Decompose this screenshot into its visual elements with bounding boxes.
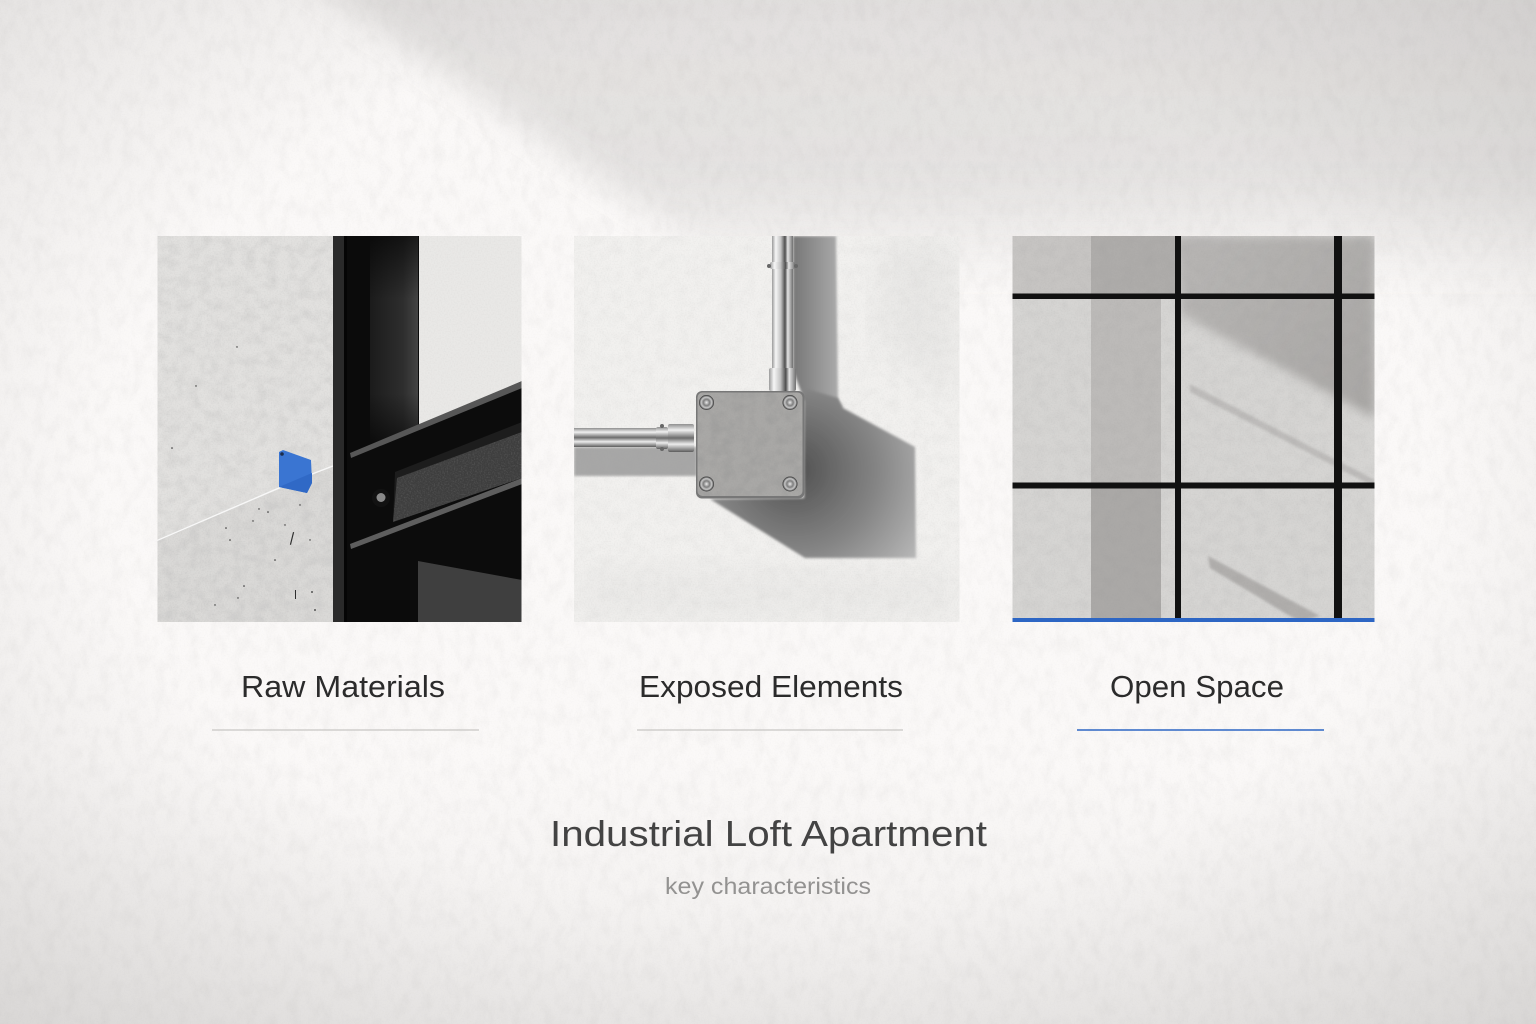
- panel: exposed elements photo: [574, 236, 960, 622]
- label: raw materials: Raw Materials: [241, 669, 445, 704]
- vertical conduit: [767, 236, 798, 391]
- cast shadow: junction box: [710, 388, 916, 558]
- label: open space: Open Space: [1110, 669, 1284, 704]
- steel column and shadow: [333, 236, 419, 622]
- title: Industrial Loft Apartment: [550, 813, 987, 854]
- concrete wall: [157, 236, 334, 622]
- panel: open space photo: [1012, 236, 1375, 622]
- subtitle: key characteristics: [665, 873, 871, 899]
- junction box: [696, 391, 804, 498]
- panel: raw materials photo: [157, 236, 523, 622]
- blue patch accent: [279, 450, 312, 493]
- wall surface: [1012, 236, 1375, 622]
- cast shadow: vertical strip: [793, 236, 843, 408]
- blue accent bar: [1012, 618, 1374, 622]
- pipe shadow: [574, 447, 697, 476]
- label: exposed elements: Exposed Elements: [639, 669, 903, 704]
- right wall: [419, 236, 522, 424]
- horizontal conduit: [574, 424, 694, 452]
- steel beam: [350, 381, 523, 600]
- plaster wall: [574, 236, 960, 622]
- lower right opening: [418, 561, 522, 622]
- black window grid: [1012, 236, 1375, 622]
